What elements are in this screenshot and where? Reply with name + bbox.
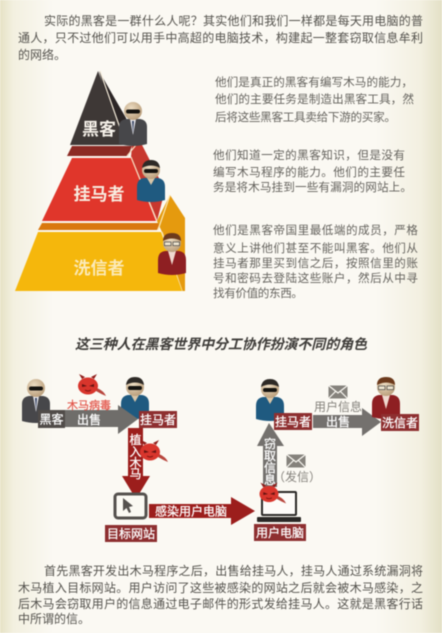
label: plant trojan: 木 [129,456,142,470]
label: steal information: 息 [264,472,276,487]
text block: washer: 意义上讲他们甚至不能叫黑客。他们从 [213,241,418,255]
label: hacker [38,410,65,428]
label: hacker: 黑客 [82,119,116,139]
label: infect: 感染用户电脑 [155,504,227,518]
person: hacker on pyramid [119,102,147,146]
label: sell: 出售 [77,412,101,427]
icon: target site monitor [115,494,146,518]
closing paragraph [18,563,423,626]
label: sell: 出售 [326,414,350,429]
icon: envelope user info [328,386,348,398]
intro paragraph: 实际的黑客是一群什么人呢？其实他们和我们一样都是每天用电脑的普 [44,13,423,28]
label: user computer: 用户电脑 [256,525,304,540]
pyramid chart [15,71,185,291]
intro paragraph [18,13,423,62]
label: target site: 目标网站 [107,527,155,541]
closing paragraph: 后木马会窃取用户的信息通过电子邮件的形式发给挂马人。这就是黑客行话 [18,596,423,611]
arrow: sell from hacker [38,405,138,434]
label: steal information: 窃 [264,436,276,451]
closing paragraph: 首先黑客开发出木马程序之后，出售给挂马人，挂马人通过系统漏洞将 [44,563,423,578]
icon: user laptop [257,492,301,522]
text block: hanger: 他们知道一定的黑客知识，但是没有 [213,148,405,162]
icon: trojan demon middle [140,440,168,462]
text block: hacker: 后将这些黑客工具卖给下游的买家。 [215,110,396,124]
label: hanger right: 挂马者 [275,415,311,429]
label: send mail: （发信） [273,469,321,484]
text block: hacker: 他们的主要任务是制造出黑客工具，然 [215,92,414,106]
label: plant trojan [129,432,142,481]
arrow: sell user info [313,408,381,436]
person: hanger right in flow [256,379,284,421]
text block: hanger [213,148,412,194]
icon: trojan demon top [78,374,106,396]
label: plant trojan: 入 [129,445,142,459]
label: hanger left: 挂马者 [140,413,176,427]
intro paragraph: 的网络。 [18,47,66,62]
person: hacker in flow [22,379,50,423]
text block: hacker [215,75,414,124]
intro paragraph: 通人，只不过他们可以用手中高超的电脑技术，构建起一整套窃取信息牟利 [18,30,423,45]
text block: washer: 挂马者那里买到信之后，按照信里的账 [213,256,418,270]
label: steal information: 信 [264,461,276,475]
label: user information: 用户信息 [314,399,362,414]
closing paragraph: 木马植入目标网站。用户访问了这些被感染的网站之后就会被木马感染，之 [18,580,423,595]
tier: mail washer [15,232,182,291]
label: plant trojan: 马 [129,467,142,481]
label: steal information [264,436,276,487]
person: washer on pyramid [158,233,186,275]
text block: hanger: 务是将木马挂到一些有漏洞的网站上。 [213,180,412,194]
icon: trojan demon on laptop [260,483,286,504]
arrow: infect user computer [149,497,255,525]
label: trojan virus: 木马病毒 [67,398,111,412]
text block: washer: 找有价值的东西。 [213,286,303,300]
text block: washer: 号和密码去登陆这些账户，然后从中寻 [213,271,418,285]
icon: envelope send [286,454,306,468]
section heading: 这三种人在黑客世界中分工协作扮演不同的角色 [75,336,368,352]
label: mail washer: 洗信者 [74,259,124,278]
person: hanger on pyramid [137,160,165,202]
tier: trojan hanger [38,145,185,291]
text block: hanger: 编写木马程序的能力。他们的主要任 [213,165,405,179]
label: trojan hanger: 挂马者 [74,185,124,204]
person: hanger left in flow [121,377,149,419]
label: washer: 洗信者 [382,416,418,430]
text block: washer [213,223,418,300]
person: washer in flow [372,377,400,419]
arrow: plant trojan [122,428,150,499]
label: steal information: 取 [264,449,276,463]
arrow: steal information [257,423,284,487]
closing paragraph: 中所谓的信。 [18,611,90,626]
text block: hacker: 他们是真正的黑客有编写木马的能力， [215,75,413,89]
label: hacker: 黑客 [39,412,64,426]
label: plant trojan: 植 [129,432,142,447]
text block: washer: 他们是黑客帝国里最低端的成员，严格 [213,223,418,237]
tier: hacker [67,71,165,221]
